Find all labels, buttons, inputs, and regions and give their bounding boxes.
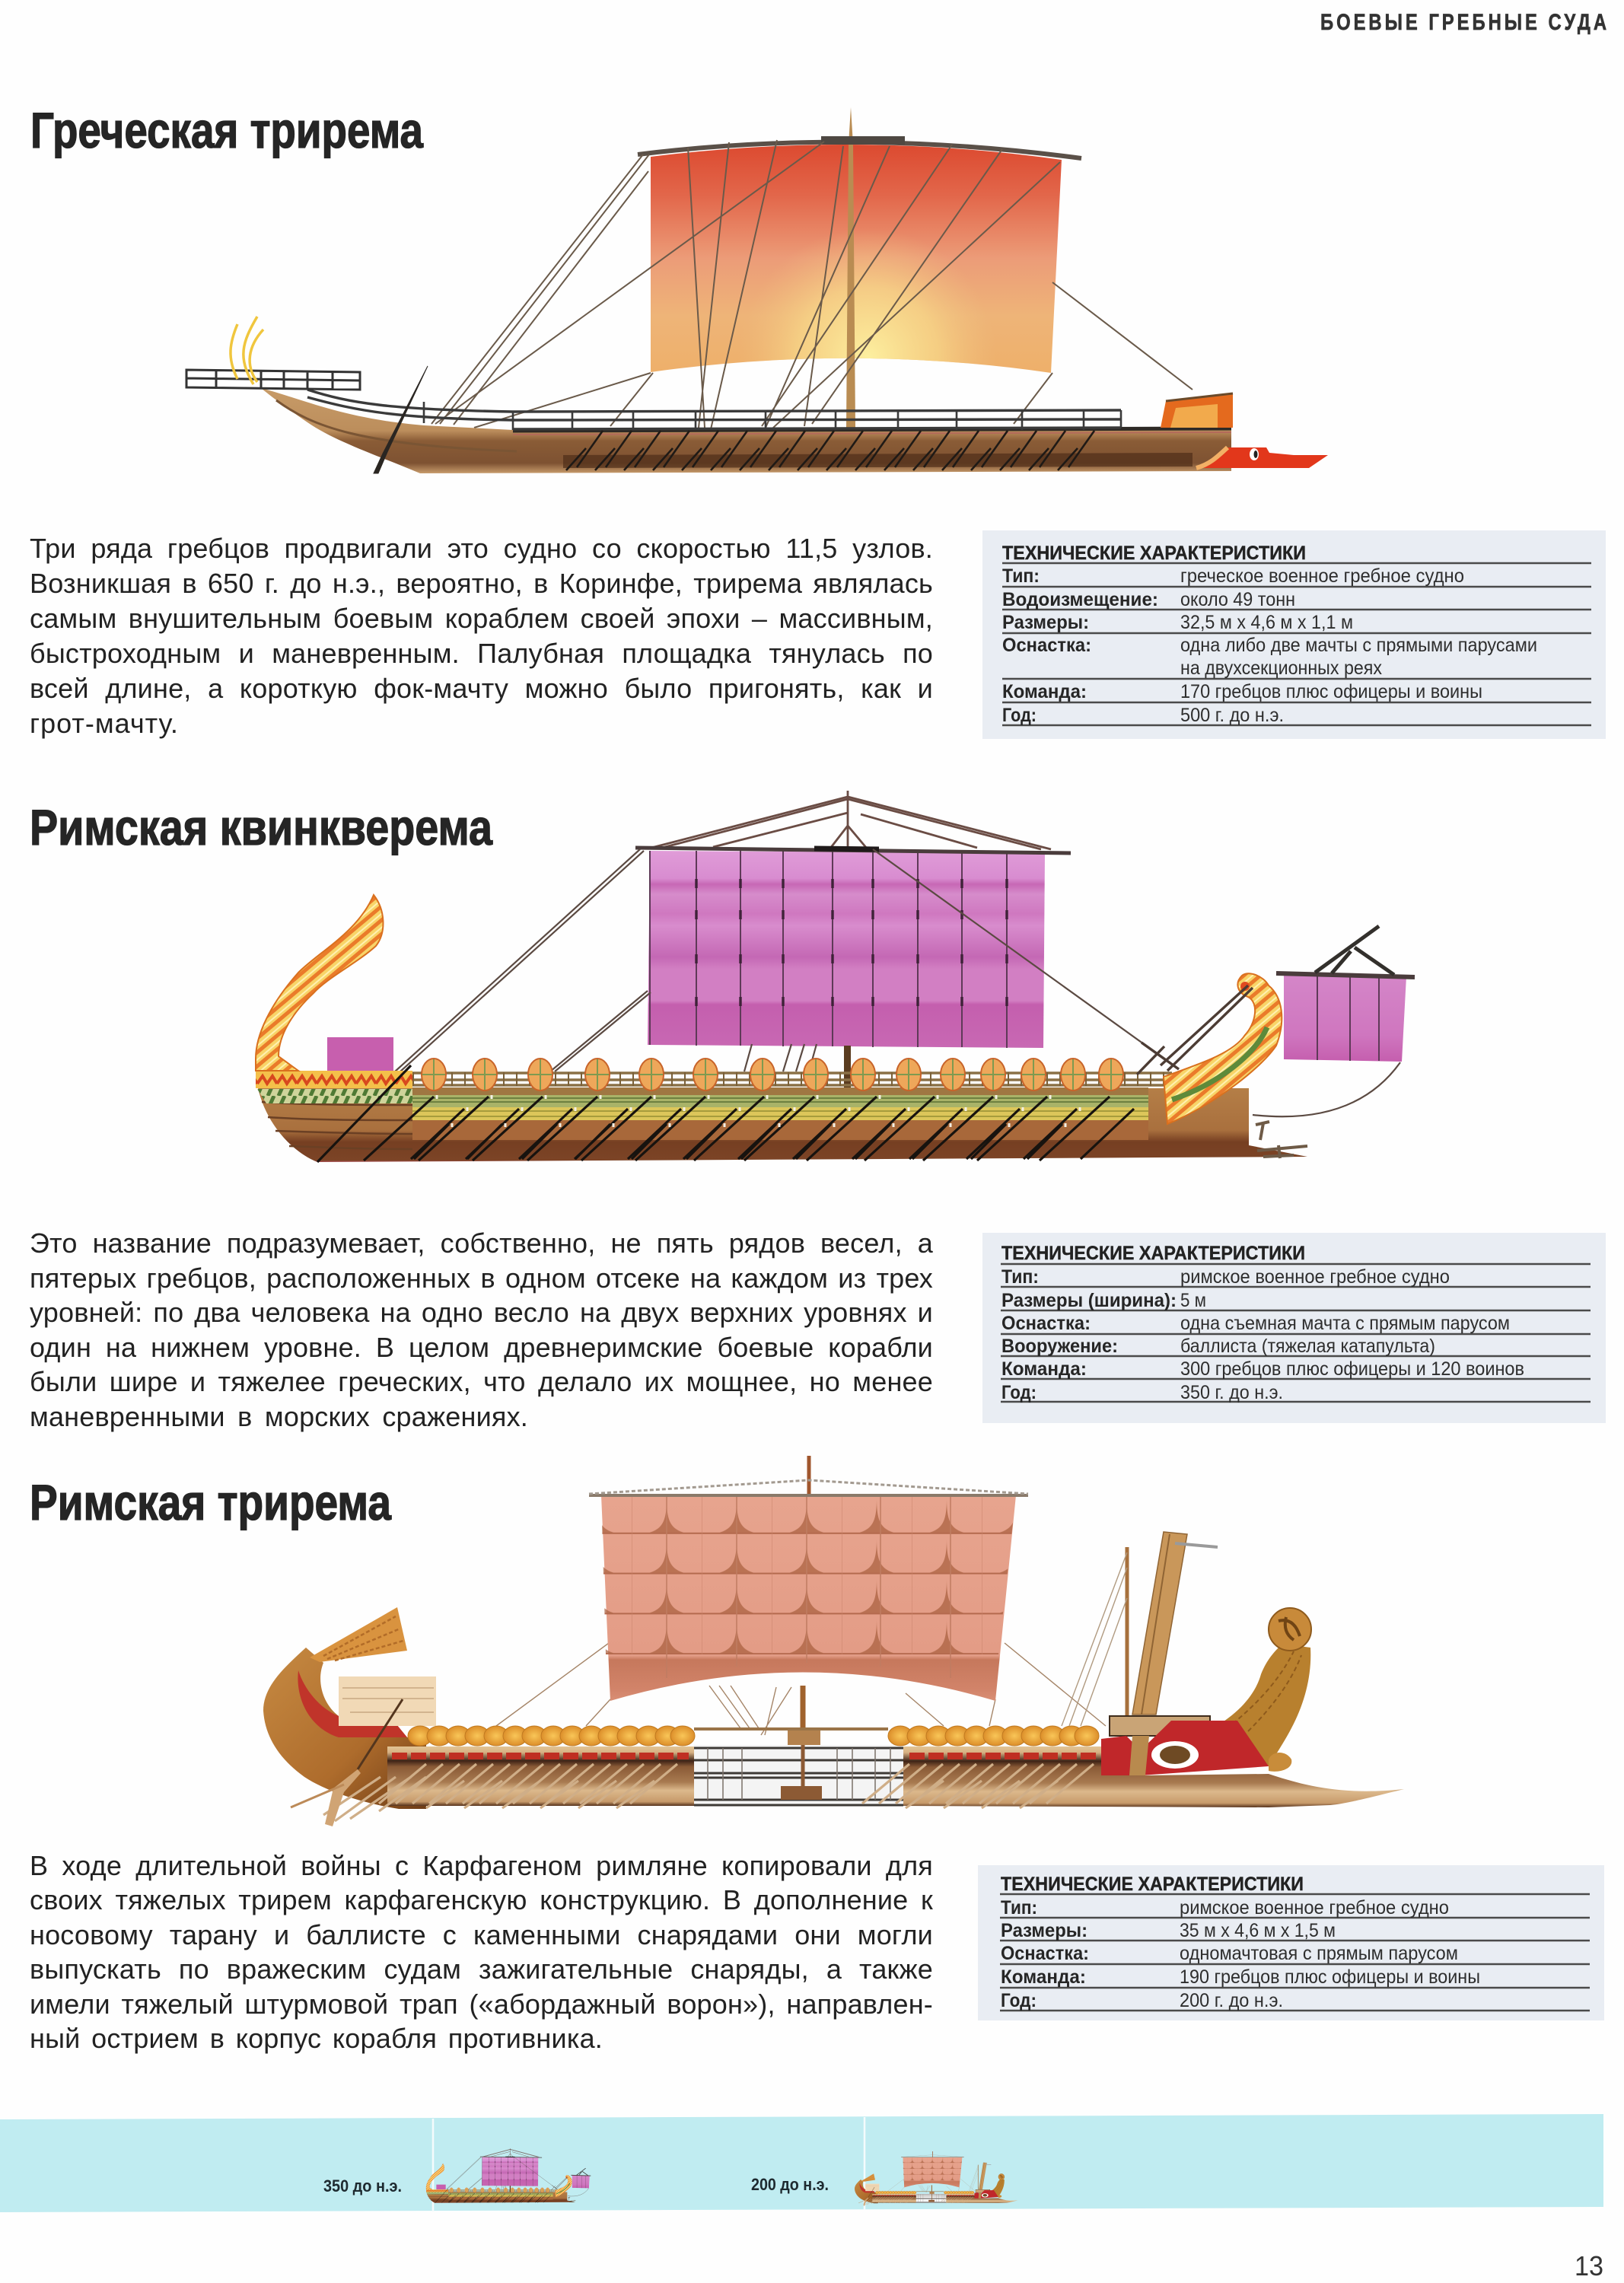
paragraph: Roman trireme: В ходе длительной войны с Карфагеном римляне копировали для (30, 1850, 933, 1881)
rows: одна съемная мачта с прямым парусом (1180, 1313, 1510, 1334)
stern (263, 1648, 426, 1809)
rows: Год: (1001, 1990, 1036, 2011)
top rigging (651, 791, 1051, 849)
title: Greek trireme: Греческая трирема (30, 102, 424, 158)
rows: 170 гребцов плюс офицеры и воины (1180, 681, 1482, 702)
rows: баллиста (тяжелая катапульта) (1180, 1336, 1435, 1357)
sail (651, 145, 1062, 373)
hull (261, 388, 1231, 473)
steering oar (374, 366, 428, 473)
title: Roman trireme: Римская трирема (30, 1474, 392, 1530)
stern gallery (186, 370, 360, 390)
heading: ТЕХНИЧЕСКИЕ ХАРАКТЕРИСТИКИ (1001, 1874, 1304, 1895)
paragraph: Greek trireme: самым внушительным боевым кораблем своей эпохи – массивным, (30, 603, 933, 634)
panel background (978, 1865, 1604, 2020)
mast and yard (589, 1456, 1028, 1729)
paragraph: Greek trireme: быстроходным и маневренным. Палубная площадка тянулась по (30, 638, 933, 669)
shields right (888, 1726, 1099, 1746)
deck rail (412, 1073, 1172, 1085)
text: Roman quinquereme spec panel (982, 1233, 1606, 1423)
title: Roman quinquereme: Римская квинкверема (30, 799, 493, 855)
hull (256, 1071, 1307, 1162)
rows: 190 гребцов плюс офицеры и воины (1180, 1966, 1480, 1988)
rows (1002, 563, 1591, 726)
rows: 5 м (1180, 1290, 1206, 1311)
stern ornament (256, 895, 383, 1071)
rows: Год: (1002, 705, 1036, 726)
yard (638, 136, 1081, 158)
paragraph: Greek trireme: Три ряда гребцов продвигали это судно со скоростью 11,5 узлов. (30, 533, 933, 564)
rows: на двухсекционных реях (1180, 658, 1382, 679)
bow post (1210, 1608, 1311, 1766)
rows: около 49 тонн (1180, 589, 1295, 610)
paragraph: Roman quinquereme: один на нижнем уровне. В целом древнеримские боевые корабли (30, 1332, 933, 1363)
illustration: Greek trireme (186, 107, 1328, 473)
rows: одна либо две мачты с прямыми парусами (1180, 635, 1537, 656)
shields (422, 1059, 1123, 1091)
bow spars (1137, 985, 1253, 1075)
steering oar (291, 1699, 403, 1826)
ram (1196, 447, 1328, 468)
timeline thumbnail: Roman trireme (855, 2151, 1017, 2206)
rows: Размеры (ширина): (1001, 1290, 1177, 1311)
rows: Оснастка: (1001, 1943, 1089, 1964)
bowsprit (1315, 926, 1394, 975)
rows (1000, 1894, 1590, 2011)
panel background (982, 1233, 1606, 1423)
timeline label 200: 200 до н.э. (751, 2175, 829, 2194)
rows: Размеры: (1001, 1920, 1087, 1941)
oar ports (437, 1095, 1080, 1127)
paragraph: Roman trireme: своих тяжелых трирем карфагенскую конструкцию. В дополнение к (30, 1884, 933, 1915)
heading: ТЕХНИЧЕСКИЕ ХАРАКТЕРИСТИКИ (1002, 543, 1306, 564)
strip background (0, 2114, 1603, 2212)
stern plumes (231, 317, 263, 384)
rows: Оснастка: (1002, 635, 1091, 656)
text: Greek trireme spec panel (982, 530, 1606, 739)
rows: Команда: (1001, 1358, 1087, 1380)
rows: Вооружение: (1001, 1336, 1118, 1357)
timeline label 350: 350 до н.э. (323, 2176, 402, 2195)
anchor (1256, 1122, 1307, 1158)
paragraph: Roman quinquereme (30, 1227, 933, 1432)
stays (395, 849, 1400, 1116)
rows: Водоизмещение: (1002, 589, 1158, 610)
paragraph: Roman quinquereme: были шире и тяжелее греческих, что делало их мощнее, но менее (30, 1366, 933, 1397)
rows (1001, 1264, 1591, 1403)
beak (1269, 1753, 1291, 1772)
row of red oar ports (392, 1753, 1100, 1759)
paragraph: Roman trireme: выпускать по вражеским судам зажигательные снаряды, а также (30, 1953, 933, 1985)
sail rigging (496, 1643, 1106, 1735)
illustration: Roman quinquereme (256, 791, 1415, 1162)
yard (635, 848, 1071, 853)
rows: греческое военное гребное судно (1180, 565, 1464, 587)
rowing cutaway (694, 1728, 903, 1806)
oars (566, 431, 1094, 470)
paragraph: Greek trireme: всей длине, а короткую фок-мачту можно было пригонять, как и (30, 673, 933, 704)
rows: 500 г. до н.э. (1180, 705, 1284, 726)
sternpost cabin (1161, 393, 1233, 428)
rigging (431, 140, 1193, 429)
panel background (982, 530, 1606, 739)
oars (323, 1764, 1094, 1821)
paragraph: Roman quinquereme: маневренными в морских сражениях. (30, 1401, 528, 1432)
rows: одномачтовая с прямым парусом (1180, 1943, 1458, 1964)
rows: Команда: (1002, 681, 1087, 702)
rows: Оснастка: (1001, 1313, 1091, 1334)
rows: 200 г. до н.э. (1180, 1990, 1283, 2011)
page number: 13 (1575, 2250, 1603, 2281)
text: Roman trireme spec panel (978, 1865, 1604, 2020)
deck railing (307, 390, 1121, 430)
paragraph: Roman trireme (30, 1850, 933, 2054)
stern deck band (256, 1071, 412, 1088)
timeline strip (0, 2114, 1603, 2212)
rows: Тип: (1001, 1266, 1039, 1288)
fore sail (1276, 973, 1415, 1062)
rows: Тип: (1002, 565, 1040, 587)
rows: римское военное гребное судно (1180, 1266, 1450, 1288)
paragraph: Greek trireme: Возникшая в 650 г. до н.э., вероятно, в Коринфе, трирема являлась (30, 568, 933, 599)
hull planks (262, 1102, 412, 1149)
bow upperworks (1110, 1716, 1210, 1736)
stern panel (339, 1676, 436, 1726)
shields left (408, 1726, 695, 1746)
sail (601, 1495, 1016, 1701)
rows: римское военное гребное судно (1180, 1897, 1449, 1918)
mast (846, 107, 855, 428)
hull left block (387, 1746, 694, 1806)
hull right block and ram (903, 1746, 1404, 1807)
rows: 350 г. до н.э. (1180, 1382, 1283, 1403)
central hull bands (412, 1087, 1148, 1140)
heading: ТЕХНИЧЕСКИЕ ХАРАКТЕРИСТИКИ (1001, 1243, 1305, 1264)
paragraph: Roman trireme: носовому тарану и баллисте с каменными снарядами они могли (30, 1919, 933, 1950)
stern fan (310, 1607, 407, 1662)
rows: Команда: (1001, 1966, 1086, 1988)
mast (844, 1046, 851, 1091)
paragraph: Roman trireme: ный острием в корпус корабля противника. (30, 2023, 603, 2054)
paragraph: Greek trireme (30, 533, 933, 739)
paragraph: Greek trireme: грот-мачту. (30, 708, 179, 739)
rows: Год: (1001, 1382, 1036, 1403)
rows: 35 м x 4,6 м x 1,5 м (1180, 1920, 1336, 1941)
boarding bridge (1062, 1532, 1218, 1726)
rows: Тип: (1001, 1897, 1037, 1918)
timeline thumbnail: quinquereme (426, 2148, 591, 2203)
paragraph: Roman trireme: имели тяжелый штурмовой трап («абордажный ворон»), направлен- (30, 1988, 933, 2020)
paragraph: Roman quinquereme: уровней: по два человека на одно весло на двух верхних уровнях и (30, 1297, 933, 1328)
rows: 32,5 м x 4,6 м x 1,1 м (1180, 612, 1353, 633)
eye (1151, 1741, 1199, 1769)
green stern band (257, 1089, 412, 1103)
rows: Размеры: (1002, 612, 1089, 633)
paragraph: Roman quinquereme: пятерых гребцов, расположенных в одном отсеке на каждом из трех (30, 1262, 933, 1294)
illustration: Roman trireme (263, 1456, 1404, 1826)
red bow panel (1101, 1721, 1269, 1775)
stern cabin panel (327, 1037, 393, 1071)
rows: 300 гребцов плюс офицеры и 120 воинов (1180, 1358, 1524, 1380)
bow ornament (1164, 973, 1282, 1124)
oars (317, 1065, 1134, 1162)
paragraph: Roman quinquereme: Это название подразумевает, собственно, не пять рядов весел, а (30, 1227, 933, 1259)
main sail (648, 851, 1045, 1048)
